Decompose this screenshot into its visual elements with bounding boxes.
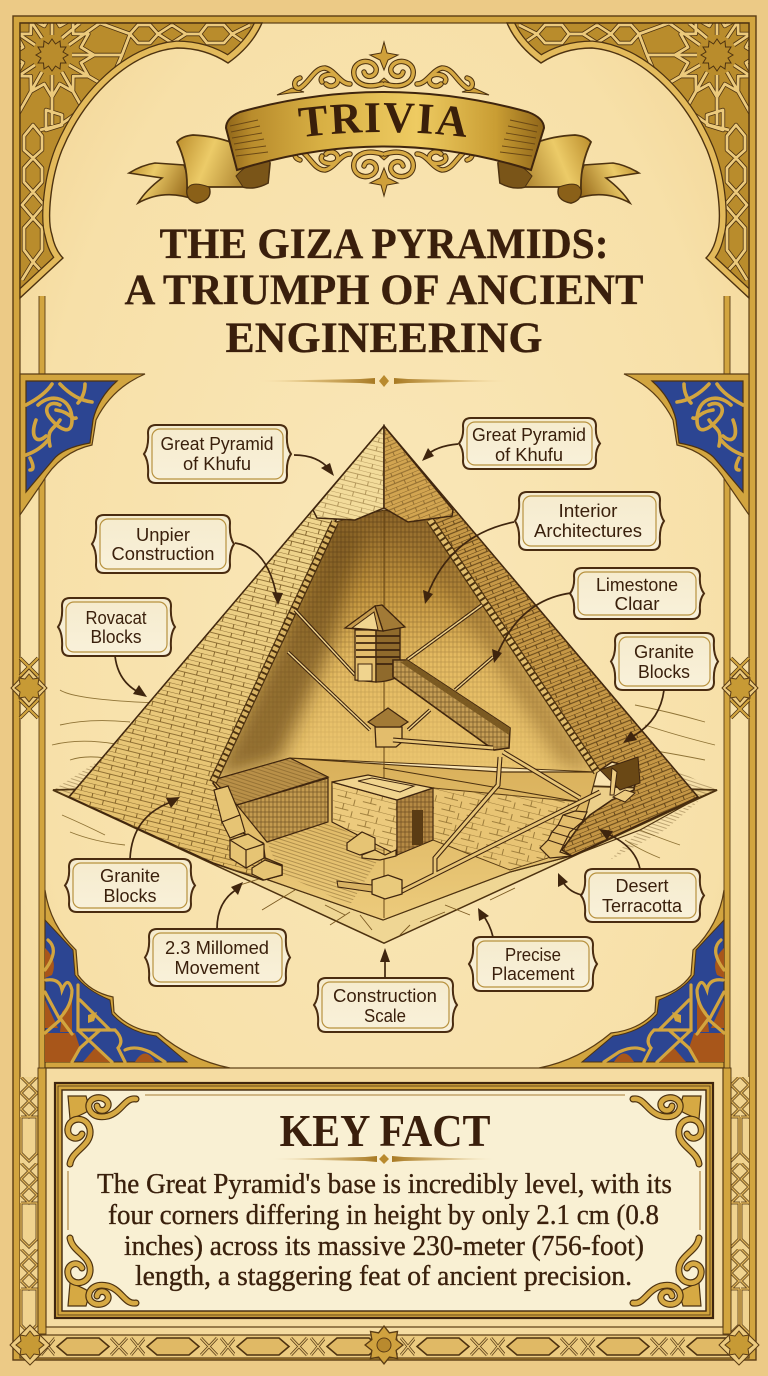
arrow: Desert Terracotta upper xyxy=(599,829,640,869)
right far tail xyxy=(572,163,639,203)
panel: top left spandrel xyxy=(10,13,262,298)
capstone right half xyxy=(384,426,453,522)
label: Rovacat Blocks xyxy=(58,598,175,656)
label: Granite Blocks left: Blocks xyxy=(104,886,156,906)
label: Great Pyramid of Khufu left: Great Pyramid xyxy=(160,434,274,454)
pyramid cutaway illustration xyxy=(53,426,717,943)
divider under title xyxy=(257,375,510,387)
passages xyxy=(393,740,600,892)
ornament: bottom right scroll xyxy=(633,1238,701,1306)
interior hatching xyxy=(236,510,582,762)
icon: bottom centre star xyxy=(365,1326,403,1364)
arrow: Precise Placement xyxy=(478,908,493,937)
stone box chamber xyxy=(332,775,433,855)
label: Limestone Clɑar: Limestone xyxy=(596,575,678,595)
banner: ribbon with TRIVIA xyxy=(126,91,642,205)
shaft lines xyxy=(288,605,493,730)
label: Interior Architectures: Architectures xyxy=(534,521,642,541)
upper chamber xyxy=(345,605,405,682)
lower chamber xyxy=(368,708,408,747)
label: Granite Blocks right: Granite xyxy=(634,642,694,662)
label: Unpier Construction: Unpier xyxy=(136,525,190,545)
label: Great Pyramid of Khufu right: Great Pyramid xyxy=(472,425,586,445)
label: Rovacat Blocks: Rovacat xyxy=(86,608,146,628)
label: Great Pyramid of Khufu right: of Khufu xyxy=(495,445,563,465)
arrow: Great Pyramid left xyxy=(294,455,334,476)
left face xyxy=(69,426,384,880)
ornament: lower filigree xyxy=(277,143,489,196)
icon: bottom right star xyxy=(719,1325,759,1365)
arrow: Granite Blocks left xyxy=(130,797,180,859)
border: right gold strip xyxy=(723,1068,731,1334)
label: Limestone Clɑar xyxy=(570,568,704,619)
text block: key fact body: four corners differing in height by only 2.1 cm (0.8 xyxy=(108,1199,659,1231)
label: Granite Blocks left xyxy=(65,859,195,912)
label: Great Pyramid of Khufu left: of Khufu xyxy=(183,454,251,474)
icon: side star left xyxy=(11,658,47,718)
label: Precise Placement xyxy=(469,937,597,991)
centre line xyxy=(383,510,385,918)
corner panel: upper right blue xyxy=(624,374,749,515)
corner panel: lower right blue xyxy=(539,890,724,1068)
label: 2.3 Millomed Movement xyxy=(145,929,290,986)
border: bottom chain xyxy=(20,1335,749,1358)
label: Granite Blocks left: Granite xyxy=(100,866,160,886)
label: Interior Architectures xyxy=(515,492,664,550)
title: ENGINEERING xyxy=(226,315,542,362)
left broken stones xyxy=(214,786,282,880)
label: Rovacat Blocks: Blocks xyxy=(90,627,142,647)
icon: side star right xyxy=(722,658,758,718)
arrow: Limestone Clear xyxy=(492,593,571,663)
label: Construction Scale xyxy=(314,978,457,1032)
arrow: Granite Blocks right xyxy=(623,690,664,743)
border: left gold strip xyxy=(38,1068,46,1334)
capstone left half xyxy=(313,426,384,520)
arrow: Desert Terracotta lower xyxy=(558,873,582,895)
icon: bottom left star xyxy=(10,1325,50,1365)
ornament: top right scroll xyxy=(633,1096,701,1164)
label: Unpier Construction: Construction xyxy=(112,544,214,564)
arrow: Interior Architectures xyxy=(423,522,514,604)
label: Precise Placement: Placement xyxy=(492,964,574,984)
arrow: 2.3 Millomed Movement xyxy=(217,882,243,929)
title xyxy=(124,221,644,362)
main ribbon xyxy=(226,92,544,170)
text block: key fact body: The Great Pyramid's base is incredibly level, with its xyxy=(97,1168,672,1200)
panel: top right spandrel xyxy=(507,13,759,298)
border: right lower chain xyxy=(731,1077,749,1335)
left brick edge strip xyxy=(213,522,335,782)
label: Granite Blocks right: Blocks xyxy=(638,662,690,682)
entrance block xyxy=(337,875,402,899)
interior floor xyxy=(213,758,597,920)
label: Granite Blocks right xyxy=(611,633,718,690)
grand gallery ramp xyxy=(393,660,510,750)
title: A TRIUMPH OF ANCIENT xyxy=(124,267,644,314)
heading: key fact: KEY FACT xyxy=(280,1105,490,1156)
text block: key fact body: length, a staggering feat of ancient precision. xyxy=(135,1260,632,1292)
label: 2.3 Millomed Movement: Movement xyxy=(174,958,260,978)
right opening and steps xyxy=(540,757,640,858)
border: left lower chain xyxy=(20,1077,38,1335)
left platform xyxy=(213,758,328,842)
left tail xyxy=(177,135,270,203)
text block: key fact body xyxy=(97,1168,672,1292)
label: Unpier Construction xyxy=(92,515,234,573)
label: Limestone Clɑar: Clɑar xyxy=(614,594,660,614)
label: Desert Terracotta: Desert xyxy=(616,876,668,896)
label: Precise Placement: Precise xyxy=(505,945,561,965)
ornament: top left scroll xyxy=(68,1096,136,1164)
label: Great Pyramid of Khufu left xyxy=(144,425,291,483)
right brick edge strip xyxy=(430,520,597,772)
ornament: bottom left scroll xyxy=(68,1238,136,1306)
rubble blocks xyxy=(347,832,396,860)
arrow: Construction Scale xyxy=(380,948,390,978)
label: Interior Architectures: Interior xyxy=(558,501,618,521)
arrow: Rovacat Blocks xyxy=(115,656,147,697)
text block: key fact body: inches) across its massive 230-meter (756-foot) xyxy=(124,1230,644,1262)
base paving xyxy=(53,780,717,943)
arrow: Great Pyramid right xyxy=(422,444,458,461)
interior shading wedges xyxy=(213,520,597,780)
label: Desert Terracotta: Terracotta xyxy=(602,896,683,916)
right face xyxy=(384,426,698,856)
desert sketch lines xyxy=(52,690,715,858)
interior back wall xyxy=(213,510,597,780)
ornament: top filigree xyxy=(277,42,489,95)
divider: key fact xyxy=(270,1154,497,1164)
base shadow hatching xyxy=(53,740,717,860)
label: Desert Terracotta xyxy=(581,869,704,922)
label: Construction Scale: Scale xyxy=(364,1006,406,1026)
label: 2.3 Millomed Movement: 2.3 Millomed xyxy=(165,938,269,958)
left far tail xyxy=(129,163,196,203)
right tail xyxy=(498,135,591,203)
label: Great Pyramid of Khufu right xyxy=(459,418,600,469)
right interior wall xyxy=(433,788,581,870)
arrow: Unpier Construction xyxy=(235,543,283,605)
title: THE GIZA PYRAMIDS: xyxy=(160,221,608,268)
corner panel: upper left blue xyxy=(20,374,145,515)
banner title: TRIVIA xyxy=(298,103,466,137)
panel: key fact xyxy=(46,1068,723,1327)
corner panel: lower left blue xyxy=(45,890,230,1068)
label: Construction Scale: Construction xyxy=(333,986,437,1006)
